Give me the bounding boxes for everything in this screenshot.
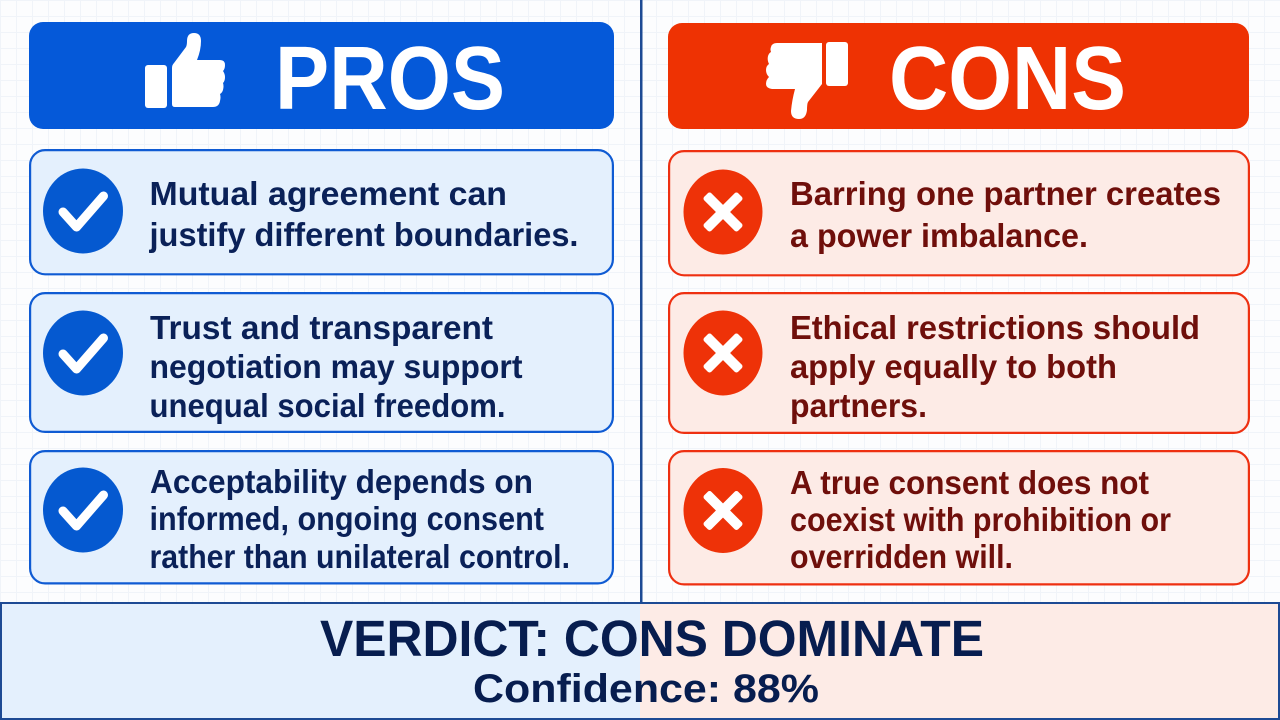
text: con 2: partners. bbox=[790, 388, 927, 425]
text: pro 2 bbox=[150, 310, 522, 425]
text: con 2: apply equally to both bbox=[790, 349, 1117, 386]
icon: check 1 bbox=[43, 168, 123, 254]
text: pro 1: Mutual agreement can bbox=[150, 176, 507, 213]
text: con 1: a power imbalance. bbox=[790, 218, 1088, 255]
text: pro 3: rather than unilateral control. bbox=[150, 539, 570, 576]
text: pro 1 bbox=[149, 176, 578, 254]
text: con 2: Ethical restrictions should bbox=[790, 310, 1200, 347]
text: con 3 bbox=[790, 465, 1171, 576]
icon: cross 2 bbox=[684, 310, 762, 396]
icon: thumbs down bbox=[766, 42, 848, 119]
icon: cross 1 bbox=[684, 170, 762, 254]
text: pro 1: justify different boundaries. bbox=[149, 217, 578, 254]
text: pro 2: negotiation may support bbox=[150, 349, 522, 386]
panel: verdict bbox=[0, 602, 1280, 720]
text: pro 3 bbox=[150, 464, 570, 576]
text: con 3: overridden will. bbox=[790, 539, 1013, 576]
panel: pros header bbox=[29, 22, 614, 129]
icon: check 3 bbox=[43, 468, 123, 552]
heading: verdict: VERDICT: CONS DOMINATE bbox=[320, 610, 984, 667]
text: con 2 bbox=[790, 310, 1200, 425]
text: pro 3: Acceptability depends on bbox=[150, 464, 533, 501]
icon: cross 3 bbox=[684, 468, 762, 553]
text: con 3: coexist with prohibition or bbox=[790, 502, 1171, 539]
text: pro 2: Trust and transparent bbox=[150, 310, 493, 347]
text: con 3: A true consent does not bbox=[790, 465, 1149, 502]
panel: cons header bbox=[668, 23, 1249, 129]
heading: pros: PROS bbox=[275, 29, 505, 129]
text: con 1: Barring one partner creates bbox=[790, 176, 1221, 213]
panel: pro card 2 bbox=[30, 293, 613, 432]
panel: con card 2 bbox=[669, 293, 1249, 433]
text: pro 2: unequal social freedom. bbox=[150, 388, 506, 425]
panel: con card 3 bbox=[669, 451, 1249, 584]
panel: con card 1 bbox=[669, 151, 1249, 275]
text: confidence: Confidence: 88% bbox=[473, 667, 819, 711]
text: pro 3: informed, ongoing consent bbox=[150, 501, 544, 538]
icon: thumbs up bbox=[145, 33, 225, 108]
text: con 1 bbox=[790, 176, 1221, 255]
panel: pro card 1 bbox=[30, 150, 613, 274]
center divider bbox=[640, 0, 642, 602]
heading: cons: CONS bbox=[889, 29, 1126, 129]
icon: check 2 bbox=[43, 310, 123, 396]
panel: pro card 3 bbox=[30, 451, 613, 583]
